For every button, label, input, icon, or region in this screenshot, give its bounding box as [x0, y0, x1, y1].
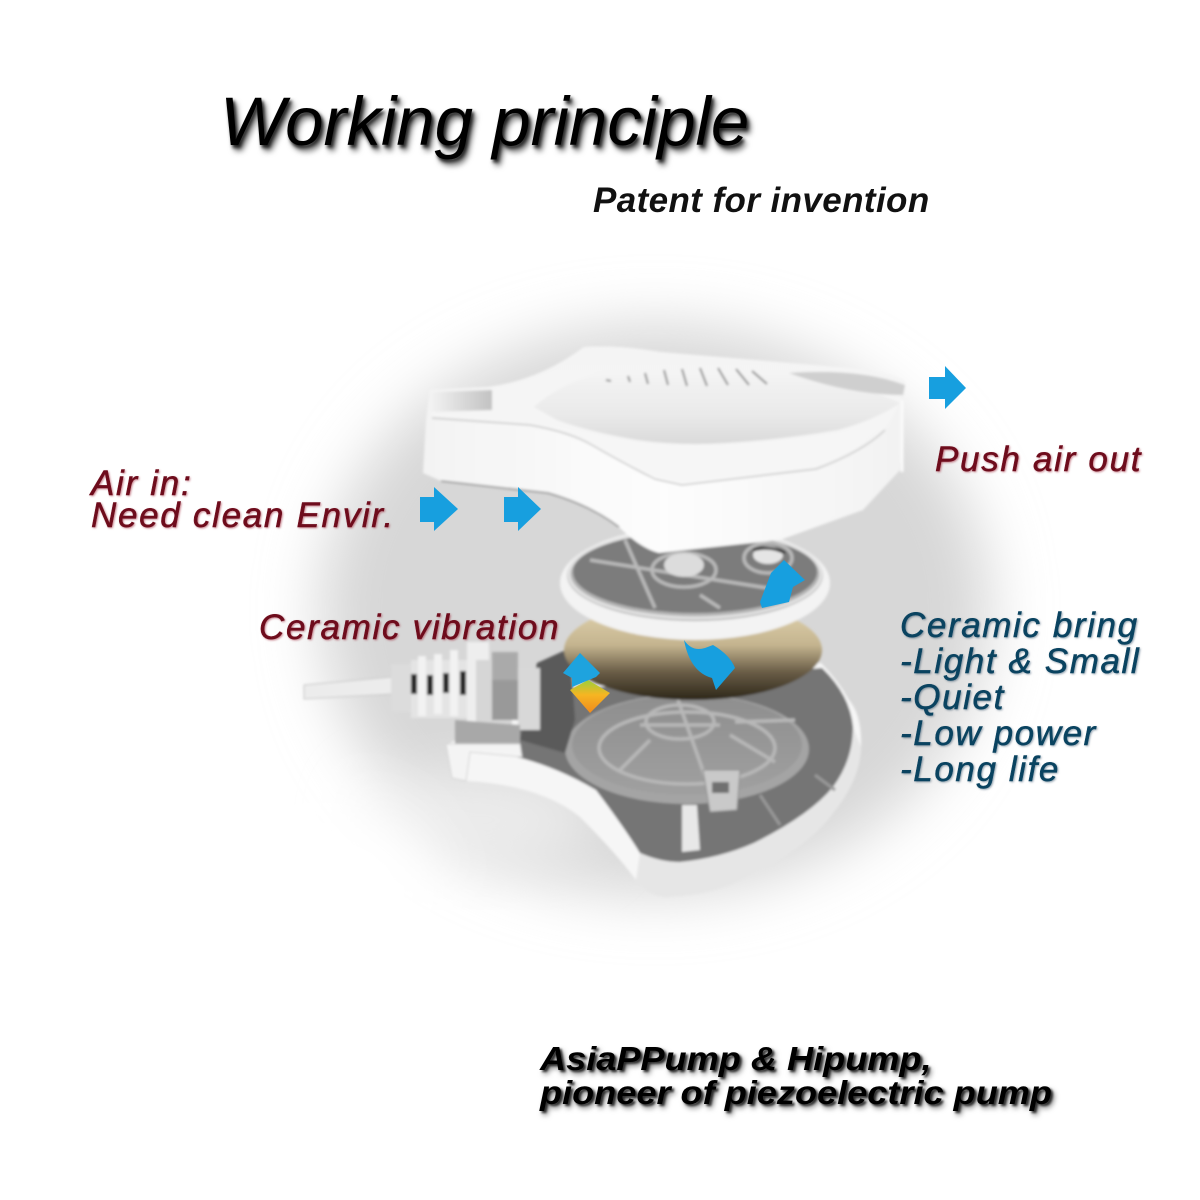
power cable and plug — [304, 642, 575, 781]
top shell — [423, 347, 905, 553]
arrow: curved around ceramic — [684, 640, 735, 690]
list: ceramic benefits: -Low power — [900, 714, 1097, 753]
footer tagline: pioneer of piezoelectric pump — [540, 1074, 1052, 1111]
footer tagline — [539, 1040, 1058, 1118]
arrow: through diaphragm — [760, 560, 805, 608]
list: ceramic benefits — [900, 606, 1142, 791]
label: air in: Air in: — [91, 464, 192, 503]
arrow: orange vibration — [570, 680, 610, 713]
background grey halo — [200, 325, 990, 980]
pump illustration — [304, 347, 905, 897]
base shell — [446, 663, 861, 897]
subtitle: Patent for invention — [593, 181, 930, 220]
arrow: air out — [929, 366, 966, 409]
label: ceramic vibration: Ceramic vibration — [259, 608, 560, 647]
round plate with ribs — [565, 694, 809, 804]
arrow: air in 1 — [420, 487, 458, 531]
arrow: blue vibration — [563, 653, 600, 687]
list: ceramic benefits: Ceramic bring — [900, 606, 1139, 645]
plastic clips — [682, 770, 835, 852]
upper ring with diaphragm — [560, 526, 830, 640]
ceramic disc — [564, 600, 822, 700]
list: ceramic benefits: -Quiet — [900, 678, 1005, 717]
white vertical edge at right — [900, 400, 904, 472]
list: ceramic benefits: -Light & Small — [900, 642, 1140, 681]
label: push air out: Push air out — [935, 440, 1142, 479]
footer tagline: AsiaPPump & Hipump, — [540, 1040, 932, 1077]
list: ceramic benefits: -Long life — [900, 750, 1060, 789]
arrow: air in 2 — [504, 487, 541, 531]
title: Working principle — [220, 83, 749, 160]
label: air in: Need clean Envir. — [91, 496, 395, 535]
label: air in — [88, 464, 395, 535]
